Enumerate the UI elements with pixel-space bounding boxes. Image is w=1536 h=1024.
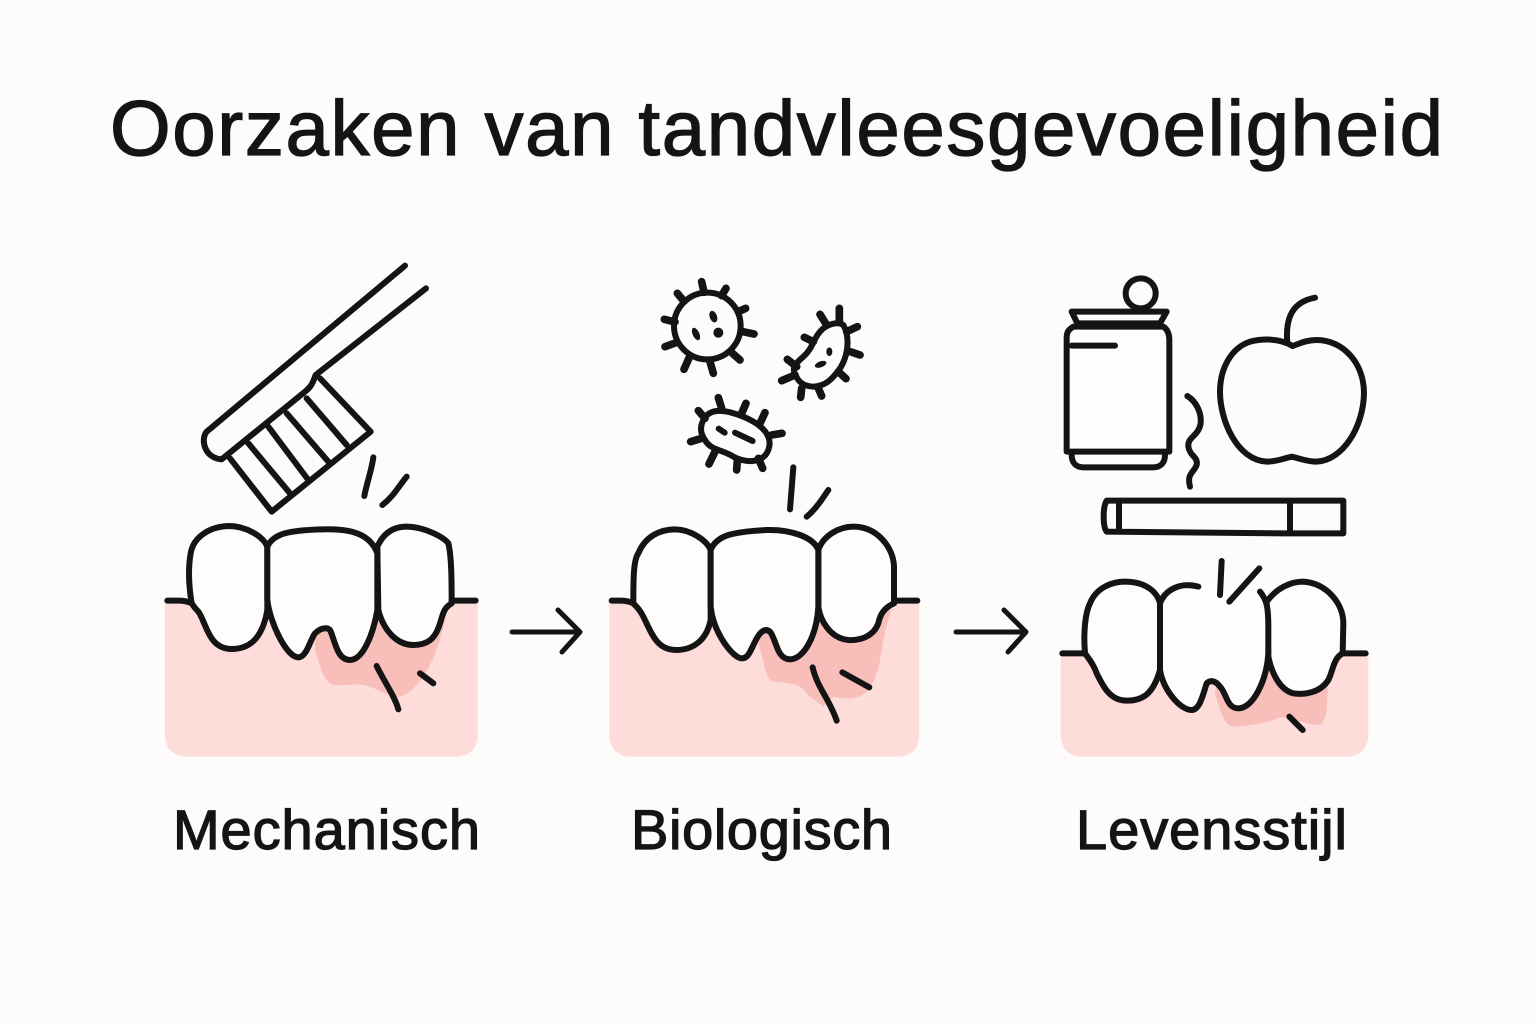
left tooth <box>1084 582 1160 701</box>
right tooth <box>1267 582 1343 694</box>
illustration: bacteria and gums <box>609 282 919 757</box>
panel: mechanisch <box>165 266 480 861</box>
gum line <box>1062 644 1366 662</box>
middle tooth <box>711 530 818 659</box>
gum tissue <box>1061 653 1368 757</box>
title: Oorzaken van tandvleesgevoeligheid <box>110 84 1443 172</box>
bacterium oval <box>691 398 782 470</box>
gum mask <box>263 617 315 663</box>
inflamed gum area <box>1215 670 1328 727</box>
middle tooth fill <box>1160 585 1268 710</box>
arrow 1 <box>512 610 580 652</box>
illustration: toothbrush and gums <box>165 266 478 757</box>
gum tissue <box>165 601 478 757</box>
toothbrush <box>204 266 426 459</box>
bacterium round <box>664 282 754 373</box>
irritation marks <box>364 457 433 709</box>
arrow 2 <box>956 610 1026 652</box>
middle tooth <box>267 529 377 660</box>
inflamed gum area <box>263 617 445 697</box>
bacterium bean <box>782 308 860 397</box>
left tooth <box>633 529 711 650</box>
label: Biologisch <box>631 798 892 861</box>
cigarette <box>1104 501 1343 533</box>
apple <box>1220 298 1364 462</box>
irritation marks <box>790 467 869 721</box>
soda can <box>1067 278 1169 467</box>
right tooth <box>377 527 452 645</box>
panel: levensstijl <box>1061 278 1368 861</box>
gum tissue <box>609 601 919 757</box>
inflamed gum area <box>758 610 892 707</box>
irritation marks <box>1220 561 1303 730</box>
gum line <box>612 601 917 603</box>
right tooth <box>818 527 894 640</box>
left tooth <box>189 526 267 649</box>
gum line <box>167 601 476 603</box>
illustration: can, apple, cigarette and gums <box>1061 278 1368 757</box>
panel: biologisch <box>609 282 919 861</box>
label: Levensstijl <box>1076 798 1347 861</box>
smoke <box>1187 396 1201 487</box>
label: Mechanisch <box>173 798 480 861</box>
middle tooth outline <box>1160 585 1268 710</box>
